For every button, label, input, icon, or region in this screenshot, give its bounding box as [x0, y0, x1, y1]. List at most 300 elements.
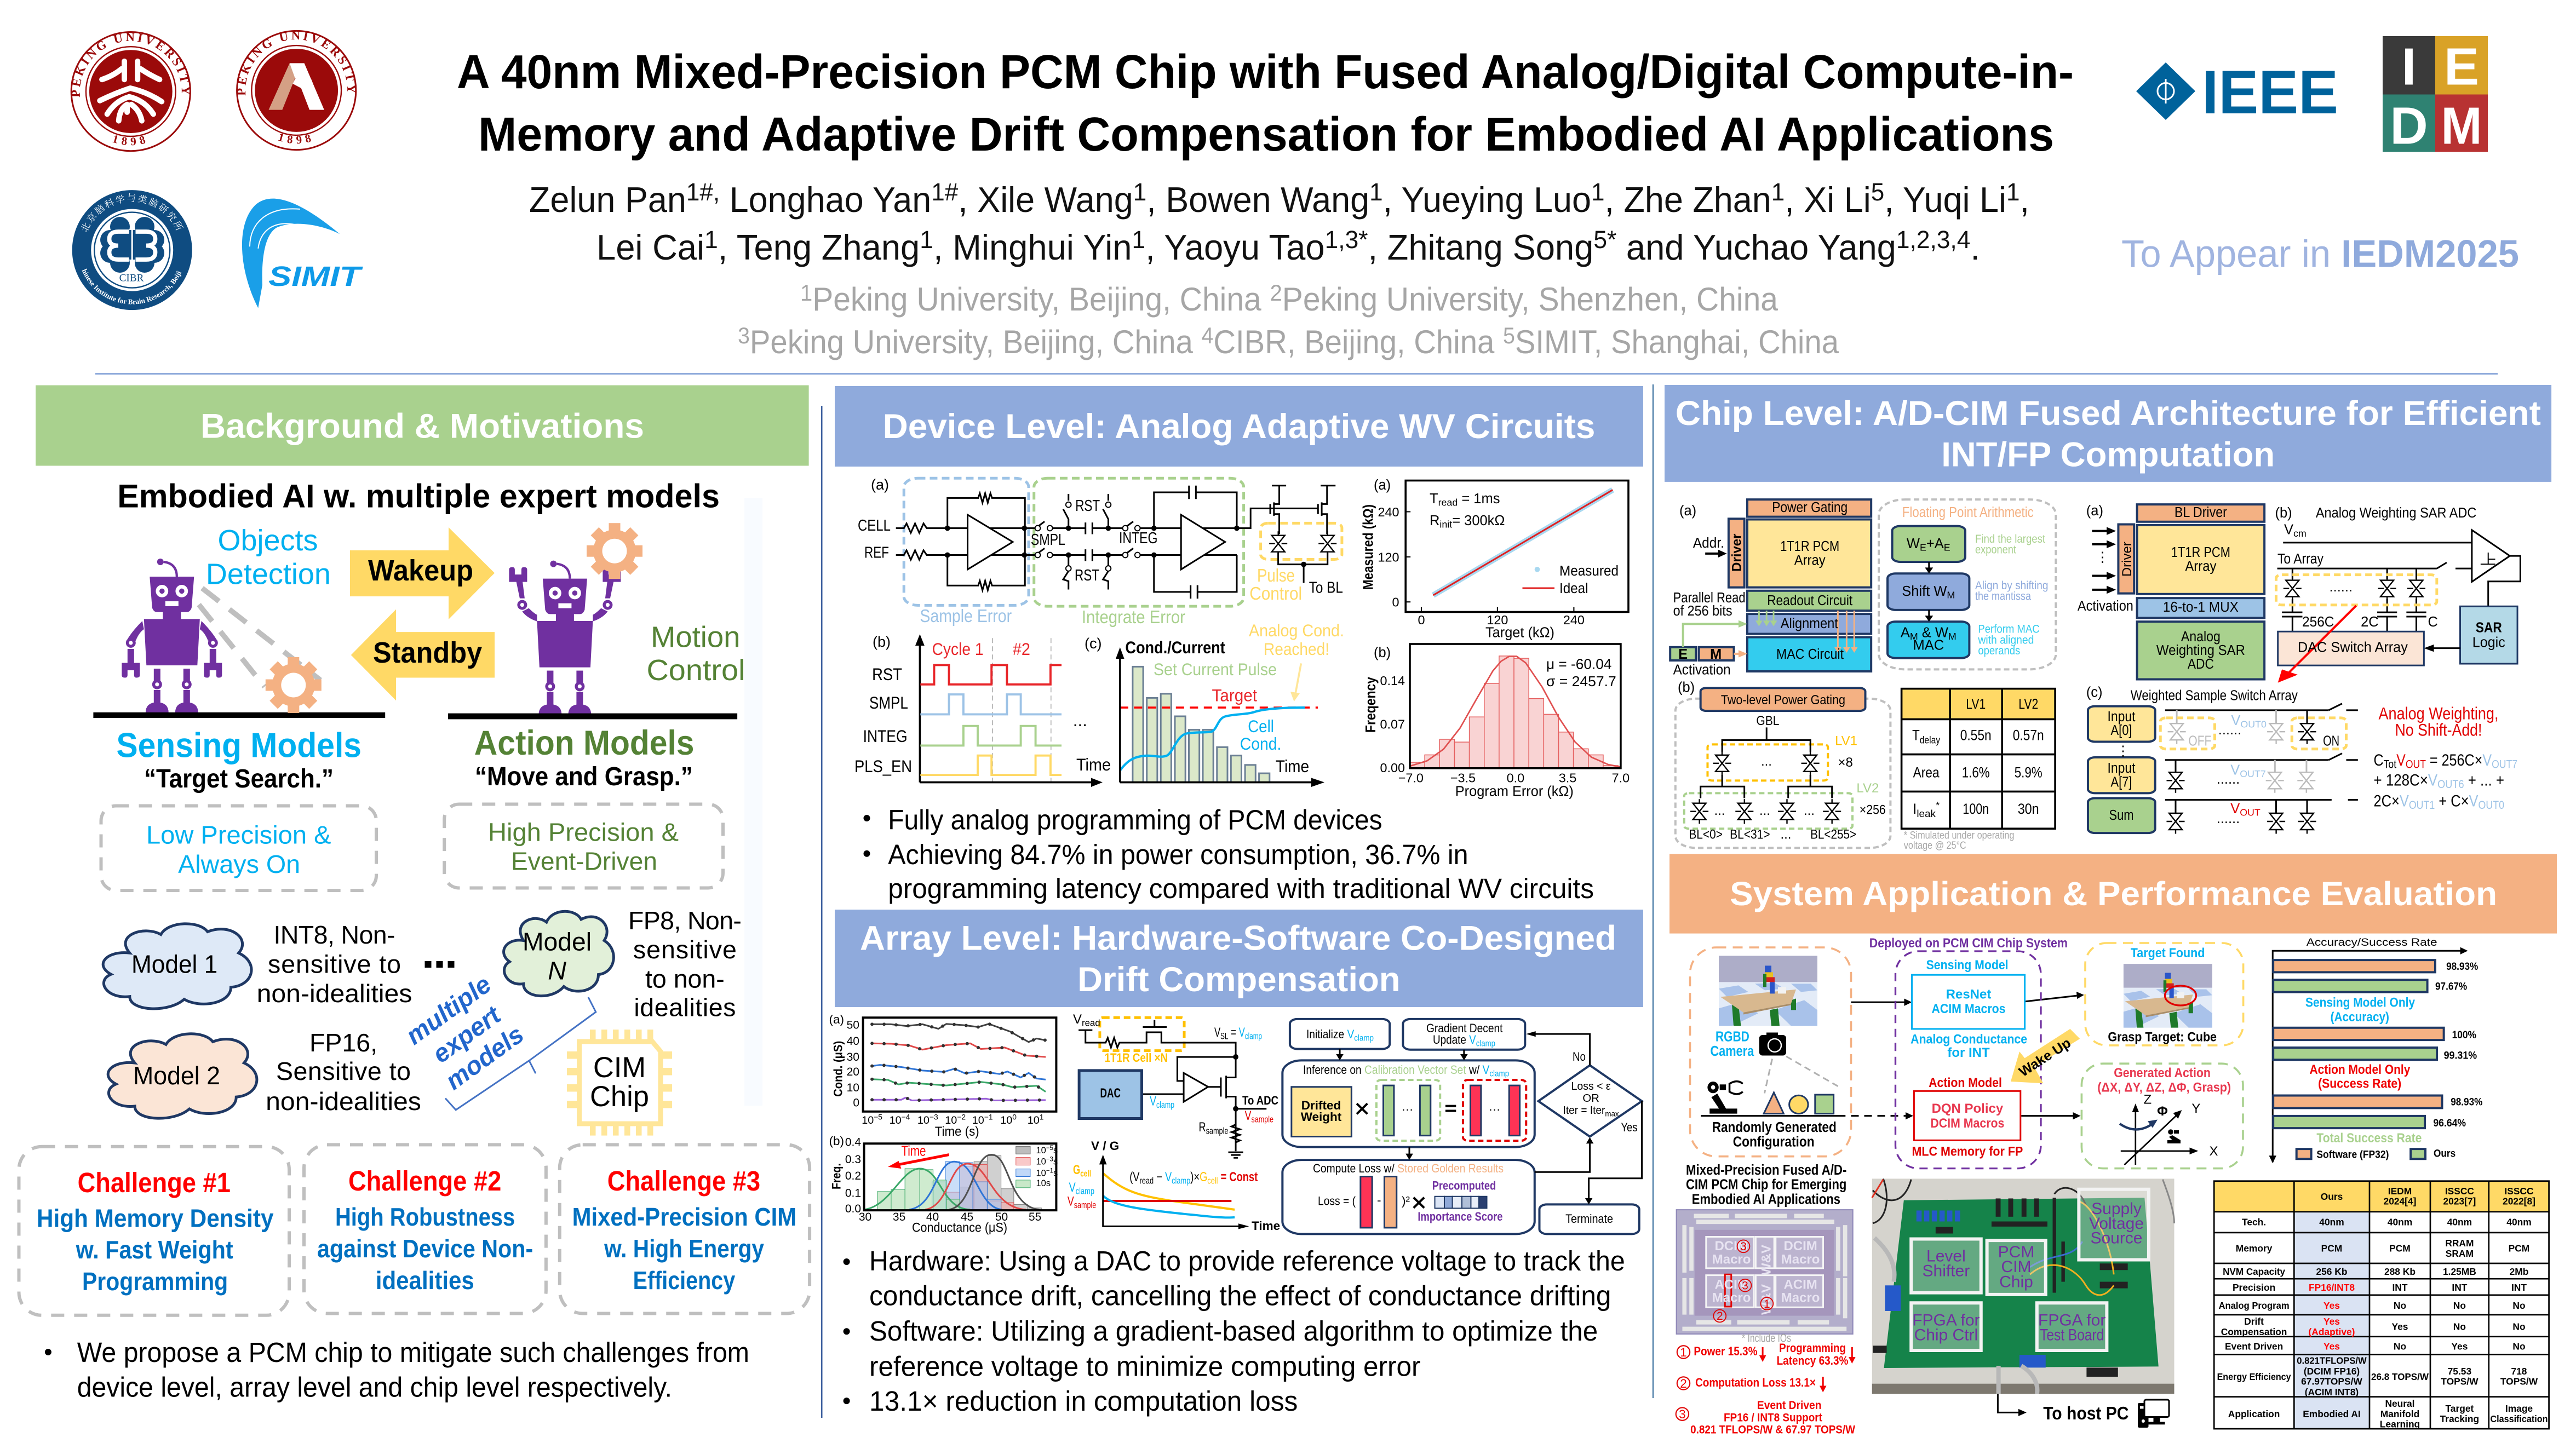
- diagram: two-level power gating: [1676, 680, 1890, 848]
- diagram: analog macro architecture: 1T1R PCM: [2171, 545, 2230, 560]
- table: comparison: TOPS/W: [2500, 1376, 2538, 1387]
- logo: IEDM: [2383, 36, 2488, 156]
- flowchart: gradient-based optimization: …: [1488, 1100, 1501, 1113]
- panel: challenge 3: [560, 1145, 810, 1313]
- authors: ,: [2020, 180, 2029, 220]
- chart: measured vs target: T: [1430, 491, 1438, 507]
- label: motion control: Control: [646, 654, 745, 687]
- table: comparison: No: [2394, 1341, 2406, 1352]
- cloud: model 2: [108, 1034, 257, 1118]
- heading: action models: Action Models: [474, 724, 694, 762]
- text: chip result metrics: 3: [1679, 1407, 1686, 1421]
- chart: measured vs target: 240: [1378, 505, 1399, 519]
- diagram: digital macro architecture: [1670, 499, 1871, 678]
- affiliations: 5: [1503, 323, 1515, 348]
- logo: Peking University seal: PEKING UNIVERSITY: [72, 33, 190, 97]
- chart: accuracy and success rate: (Accuracy): [2331, 1010, 2389, 1025]
- logo: IEEE: [2136, 58, 2338, 127]
- table: comparison: Energy Efficiency: [2217, 1371, 2291, 1382]
- diagram: two-level power gating: BL<0>: [1689, 827, 1723, 842]
- flowchart: gradient-based optimization: Gradient Decent: [1426, 1021, 1503, 1035]
- image: chip die photo: 3: [1740, 1240, 1747, 1253]
- chart: conductance histogram: Conductance (μS): [912, 1220, 1007, 1235]
- flowchart: gradient-based optimization: Initialize V: [1306, 1027, 1355, 1041]
- chart: accuracy and success rate: 98.93%: [2451, 1096, 2482, 1108]
- chart: measured vs target: Measured (kΩ): [1361, 504, 1376, 590]
- label: RGBD camera: RGBD: [1716, 1029, 1749, 1044]
- icon: camera: [1759, 1032, 1786, 1055]
- image: chip die photo: W&V: [1759, 1245, 1774, 1275]
- panel: challenge 1: Programming: [82, 1267, 228, 1296]
- affiliations: Peking University, Shenzhen, China: [1282, 281, 1778, 318]
- circuit: analog weighting SAR ADC: [2275, 505, 2520, 683]
- logo: CIBR: CIBR: [119, 273, 144, 284]
- image: test board photo: FPGA for: [1912, 1312, 1980, 1330]
- chart: accuracy and success rate: Sensing Model Only: [2305, 996, 2416, 1010]
- chart: timing diagram: SMPL: [869, 693, 908, 712]
- diagram: two-level power gating: LV1: [1835, 733, 1857, 748]
- affiliations: Peking University, Beijing, China: [750, 324, 1202, 360]
- chart: measured vs target: R: [1430, 513, 1439, 528]
- panel: deployed models: Deployed on PCM CIM Chip System: [1869, 936, 2068, 951]
- flowchart: gradient-based optimization: Weight: [1301, 1110, 1342, 1124]
- logo: IEDM: D: [2390, 97, 2428, 156]
- authors: 1,3*: [1325, 226, 1368, 254]
- table: comparison: Compensation: [2221, 1326, 2287, 1337]
- text: chip result metrics: * Include IOs: [1742, 1332, 1791, 1345]
- chart: conductance histogram: 55: [1029, 1211, 1041, 1223]
- chart: conductance over time: 10: [1028, 1114, 1040, 1126]
- circuit: analog weighting SAR ADC: To Array: [2277, 551, 2323, 567]
- diagram: two-level power gating: (b): [1678, 680, 1695, 695]
- text: proposal bullet: device level, array level and chip level respectively.: [77, 1372, 672, 1403]
- table: comparison: Yes: [2323, 1300, 2340, 1311]
- circuit: analog weighting SAR ADC: 256C: [2302, 614, 2334, 630]
- callout: low precision: [101, 806, 376, 890]
- circuit: analog weighting SAR ADC: SAR: [2476, 620, 2502, 635]
- authors: 1: [920, 226, 933, 254]
- circuit: DAC reference tracking: read: [1082, 1017, 1100, 1028]
- table: comparison: 2022[8]: [2503, 1196, 2535, 1207]
- flowchart: gradient-based optimization: clamp: [1354, 1033, 1374, 1043]
- circuit: weighted sample switch array: = 256C×: [2426, 751, 2482, 769]
- panel: generated action: Generated Action: [2114, 1066, 2211, 1080]
- panel: floating point arithmetic: & W: [1918, 625, 1948, 641]
- panel: floating point arithmetic: Perform MAC: [1978, 623, 2040, 636]
- circuit: analog WV: To BL: [1309, 579, 1343, 597]
- circuit: DAC reference tracking: clamp: [1156, 1100, 1174, 1110]
- heading: sensing models: Sensing Models: [116, 726, 362, 764]
- heading: system: System Application & Performance Evaluation: [1730, 875, 2497, 913]
- chart: conductance histogram: 10: [1036, 1168, 1046, 1178]
- arrow: wake up: [2011, 1029, 2080, 1083]
- chart: measured vs target: 120: [1487, 613, 1508, 627]
- panel: system application: [1669, 854, 2557, 1436]
- chart: voltage vs time: G: [1200, 1170, 1218, 1186]
- table: comparison: 75.53: [2448, 1366, 2471, 1377]
- circuit: analog weighting SAR ADC: (b): [2275, 505, 2292, 521]
- circuit: DAC reference tracking: V: [1073, 1012, 1082, 1027]
- label: multiple expert models: models: [440, 1020, 529, 1095]
- flowchart: gradient-based optimization: -: [1377, 1193, 1381, 1207]
- chart: conductance convergence: Time: [1276, 756, 1309, 776]
- heading: chip level: INT/FP Computation: [1941, 435, 2275, 474]
- chart: conductance over time: 0: [853, 1096, 859, 1109]
- table: comparison: 2Mb: [2510, 1266, 2528, 1277]
- chart: accuracy and success rate: 97.67%: [2435, 980, 2467, 992]
- authors: , Xi Li: [1785, 180, 1871, 220]
- image: chip die photo: Macro: [1781, 1252, 1820, 1267]
- panel: floating point arithmetic: with aligned: [1977, 634, 2034, 647]
- chart: timing diagram: INTEG: [863, 726, 908, 746]
- table: comparison: 40nm: [2447, 1217, 2472, 1228]
- logo: Peking University Shenzhen seal: 1898: [278, 134, 311, 143]
- chart: conductance over time: 10: [917, 1114, 930, 1126]
- table: power gating metrics: I: [1913, 801, 1917, 817]
- text: configuration: Configuration: [1733, 1135, 1815, 1150]
- chart: measured vs target: 0: [1392, 595, 1399, 610]
- label: objects detection: Objects: [217, 524, 318, 557]
- image: chip die photo: Macro: [1712, 1252, 1751, 1267]
- chart: conductance histogram: 10: [1036, 1146, 1046, 1155]
- icon: CIM chip: Chip: [590, 1080, 649, 1113]
- logo: Peking University seal: [70, 31, 191, 152]
- circuit: weighted sample switch array: OUT6: [2437, 778, 2464, 791]
- circuit: weighted sample switch array: A[7]: [2110, 774, 2132, 790]
- chart: voltage vs time: Time: [1252, 1219, 1280, 1233]
- heading: action models: “Move and Grasp.”: [475, 762, 693, 791]
- chart: measured vs target: Measured: [1559, 564, 1619, 579]
- flowchart: gradient-based optimization: clamp: [1476, 1039, 1495, 1048]
- logo: CIBR: 北京脑科学与类脑研究所: [81, 193, 183, 232]
- chart: conductance histogram: s: [1053, 1157, 1058, 1166]
- chart: voltage vs time: V / G: [1091, 1139, 1119, 1153]
- panel: target found: Grasp Target: Cube: [2108, 1030, 2217, 1044]
- cloud: model N: [504, 911, 613, 996]
- panel: challenge 2: Challenge #2: [348, 1165, 501, 1197]
- table: comparison: Application: [2228, 1408, 2280, 1419]
- panel: challenge 3: Challenge #3: [607, 1165, 760, 1197]
- diagram: digital macro architecture: Alignment: [1781, 616, 1838, 631]
- table: comparison: 718: [2511, 1366, 2527, 1377]
- authors: , Zhe Zhan: [1604, 180, 1771, 220]
- chart: conductance over time: 50: [847, 1019, 859, 1032]
- image: chip die photo: Macro: [1712, 1290, 1751, 1305]
- circuit: analog weighting SAR ADC: Logic: [2472, 635, 2505, 651]
- table: comparison: 2023[7]: [2443, 1196, 2476, 1207]
- circuit: DAC reference tracking: clamp: [1245, 1031, 1262, 1041]
- image: test board photo: Test Board: [2040, 1326, 2104, 1344]
- panel: floating point arithmetic: W: [1907, 536, 1920, 551]
- panel: challenge 3: Efficiency: [633, 1266, 735, 1295]
- chart: conductance over time: −3: [930, 1112, 938, 1121]
- authors: , Xile Wang: [958, 180, 1133, 220]
- chart: program error histogram: μ = -60.04: [1546, 657, 1611, 672]
- chart: program error histogram: 3.5: [1559, 771, 1576, 785]
- logo: Peking University seal: 1898: [113, 135, 146, 146]
- chart: conductance convergence: Cond.: [1240, 734, 1281, 754]
- circuit: weighted sample switch array: (c): [2086, 685, 2103, 700]
- diagram: digital macro architecture: Power Gating: [1772, 500, 1848, 515]
- heading: array level: Drift Compensation: [1077, 961, 1401, 999]
- diagram: two-level power gating: ×8: [1838, 755, 1853, 770]
- panel: deployed models: ACIM Macros: [1931, 1002, 2005, 1016]
- panel: deployed models: ResNet: [1946, 987, 1991, 1002]
- panel: generated action: Z: [2143, 1092, 2152, 1107]
- chart: conductance over time: (a): [829, 1013, 844, 1026]
- panel: floating point arithmetic: [1879, 499, 2056, 669]
- panel: floating point arithmetic: the mantissa: [1975, 590, 2031, 603]
- authors: Zelun Pan: [529, 180, 690, 220]
- image: chip die photo: DCIM: [1714, 1239, 1748, 1254]
- circuit: weighted sample switch array: Analog Weighting,: [2378, 703, 2498, 723]
- chart: conductance over time: 10: [972, 1114, 984, 1126]
- panel: floating point arithmetic: A: [1901, 625, 1910, 641]
- diagram: digital macro architecture: M: [1710, 647, 1722, 662]
- table: power gating metrics: *: [1936, 800, 1940, 812]
- chart: accuracy and success rate: 98.93%: [2446, 961, 2478, 973]
- text: array bullets: conductance drift, cancelling the effect of conductance drifting: [869, 1280, 1611, 1311]
- diagram: two-level power gating: ...: [1761, 754, 1772, 769]
- circuit: weighted sample switch array: Sum: [2109, 808, 2133, 823]
- chart: voltage vs time: V: [1069, 1180, 1077, 1195]
- chart: voltage vs time: [1068, 1139, 1280, 1233]
- panel: floating point arithmetic: Align by shifting: [1975, 579, 2048, 592]
- table: power gating metrics: LV1: [1966, 696, 1986, 712]
- chart: accuracy and success rate: Accuracy/Success Rate: [2307, 936, 2437, 948]
- heading: sensing models: “Target Search.”: [144, 764, 334, 794]
- diagram: digital macro architecture: E: [1678, 647, 1688, 662]
- flowchart: gradient-based optimization: clamp: [1489, 1070, 1509, 1079]
- label: motion control: Motion: [651, 620, 740, 653]
- subheading: embodied AI: Embodied AI w. multiple expert models: [117, 478, 720, 514]
- table: comparison: Target: [2445, 1403, 2474, 1414]
- circuit: weighted sample switch array: + ... +: [2464, 772, 2504, 790]
- table: power gating metrics: delay: [1920, 734, 1941, 746]
- table: power gating metrics: 5.9%: [2015, 764, 2043, 780]
- chart: conductance histogram: 50: [995, 1211, 1008, 1223]
- heading: action models: [474, 724, 694, 791]
- chart: program error histogram: −7.0: [1398, 771, 1424, 785]
- chart: conductance histogram: 0.1: [845, 1187, 861, 1199]
- label: objects detection: Detection: [206, 558, 331, 591]
- diagram: digital macro architecture: Addr.: [1693, 536, 1724, 551]
- logo: Peking University Shenzhen seal: PEKING UNIVERSITY: [238, 32, 355, 95]
- chart: accuracy and success rate: Software (FP32): [2316, 1148, 2389, 1160]
- authors: .: [1970, 228, 1980, 267]
- shapes: objects: [1764, 1092, 1834, 1114]
- table: comparison: Tech.: [2242, 1217, 2266, 1228]
- text: chip title: Embodied AI Applications: [1692, 1192, 1840, 1207]
- image: chip die photo: DCIM: [1783, 1239, 1817, 1254]
- circuit: weighted sample switch array: V: [2396, 751, 2426, 771]
- circuit: analog weighting SAR ADC: cm: [2293, 528, 2307, 539]
- chart: measured vs target: 120: [1378, 550, 1399, 564]
- table: power gating metrics: voltage @ 25°C: [1904, 840, 1966, 852]
- callout: low precision: Low Precision &: [146, 820, 331, 849]
- chart: accuracy and success rate: Total Success Rate: [2316, 1131, 2422, 1146]
- panel: generated action: (ΔX, ΔY, ΔZ, ΔΦ, Grasp): [2097, 1080, 2231, 1095]
- authors: 1: [1771, 178, 1785, 206]
- arrow: to host PC: [1998, 1394, 2169, 1428]
- chart: conductance over time: 10: [862, 1114, 874, 1126]
- text: chip result metrics: 1: [1680, 1346, 1687, 1359]
- chart: conductance convergence: (c): [1085, 635, 1101, 652]
- affiliations: 1: [800, 280, 812, 306]
- circuit: weighted sample switch array: [2086, 685, 2517, 833]
- flowchart: gradient-based optimization: )²: [1402, 1194, 1410, 1208]
- chart: voltage vs time: cell: [1207, 1175, 1218, 1186]
- chart: conductance histogram: s: [1053, 1146, 1058, 1155]
- arrow: standby: Standby: [373, 636, 482, 669]
- callout: high precision: Event-Driven: [511, 847, 657, 875]
- label: multiple expert models: multiple: [400, 970, 496, 1050]
- table: comparison: INT: [2511, 1282, 2527, 1293]
- callout: high precision: [444, 804, 723, 888]
- panel: input scene: [1690, 947, 1851, 1157]
- chart: accuracy and success rate: (Success Rate): [2318, 1077, 2401, 1091]
- chart: voltage vs time: cell: [1080, 1169, 1091, 1179]
- affiliations: CIBR, Beijing, China: [1213, 324, 1503, 360]
- diagram: two-level power gating: ...: [1804, 803, 1815, 818]
- flowchart: gradient-based optimization: No: [1573, 1050, 1586, 1063]
- circuit: DAC reference tracking: V: [1214, 1025, 1223, 1040]
- cloud: model 2: Model 2: [133, 1061, 220, 1090]
- chart: conductance over time: 10: [847, 1082, 859, 1094]
- chart: timing diagram: [854, 634, 1111, 787]
- text: proposal bullet: [45, 1337, 749, 1403]
- chart: voltage vs time: −: [1154, 1170, 1165, 1185]
- table: comparison: 0.821TFLOPS/W: [2297, 1355, 2367, 1366]
- diagram: two-level power gating: Two-level Power Gating: [1721, 693, 1845, 708]
- authors: , Minghui Yin: [933, 228, 1132, 267]
- image: test board photo: Supply: [2091, 1200, 2142, 1218]
- panel: floating point arithmetic: E: [1944, 542, 1950, 553]
- chart: conductance histogram: 10s: [1036, 1178, 1051, 1188]
- chart: conductance convergence: Cell: [1248, 716, 1274, 736]
- circuit: DAC reference tracking: To ADC: [1242, 1094, 1278, 1107]
- authors: [529, 178, 2029, 267]
- affiliations: Peking University, Beijing, China: [812, 281, 1270, 318]
- heading: sensing models: [116, 726, 362, 794]
- chart: voltage vs time: V: [1165, 1170, 1190, 1186]
- panel: deployed models: [1869, 936, 2068, 1169]
- panel: floating point arithmetic: M: [1947, 589, 1955, 600]
- logo: IEEE: IEEE: [2202, 58, 2338, 127]
- flowchart: gradient-based optimization: Yes: [1621, 1120, 1637, 1134]
- circuit: weighted sample switch array: OUT7: [2240, 768, 2266, 779]
- authors: 1: [2006, 178, 2020, 206]
- diagram: digital macro architecture: Array: [1794, 553, 1826, 568]
- table: comparison: 40nm: [2319, 1217, 2344, 1228]
- diagram: two-level power gating: ...: [1780, 827, 1791, 842]
- panel: floating point arithmetic: operands: [1978, 645, 2020, 657]
- circuit: DAC reference tracking: SL: [1220, 1031, 1228, 1041]
- diagram: analog macro architecture: [2078, 503, 2264, 680]
- table: comparison: No: [2453, 1300, 2466, 1311]
- chart: conductance histogram: Freq.: [829, 1163, 843, 1189]
- panel: floating point arithmetic: M: [1948, 631, 1957, 642]
- affiliations: 4: [1202, 323, 1213, 348]
- diagram: digital macro architecture: Driver: [1729, 534, 1744, 572]
- table: power gating metrics: 30n: [2018, 801, 2039, 817]
- panel: floating point arithmetic: Shift W: [1902, 584, 1947, 599]
- callout: high precision: High Precision &: [488, 818, 679, 846]
- chart: conductance convergence: Set Current Pulse: [1154, 659, 1277, 679]
- chart: conductance histogram: 0.4: [845, 1136, 861, 1148]
- circuit: analog weighting SAR ADC: V: [2284, 522, 2293, 538]
- icon: robot arm: [1701, 1082, 1845, 1116]
- title: A 40nm Mixed-Precision PCM Chip with Fused Analog/Digital Compute-in-: [457, 45, 2074, 99]
- circuit: analog WV: Sample Error: [920, 606, 1012, 626]
- arrow: wakeup: Wakeup: [368, 554, 473, 587]
- heading: device level: Device Level: Analog Adaptive WV Circuits: [883, 407, 1595, 446]
- heading: chip level: Chip Level: A/D-CIM Fused Architecture for Efficient: [1676, 394, 2541, 433]
- image: test board photo: Chip Ctrl: [1914, 1326, 1978, 1344]
- flowchart: gradient-based optimization: max: [1605, 1109, 1619, 1118]
- image: chip die photo: 3: [1742, 1279, 1748, 1292]
- chart: program error histogram: (b): [1374, 645, 1391, 660]
- chart: conductance histogram: −3: [1046, 1156, 1053, 1163]
- authors: , Bowen Wang: [1146, 180, 1369, 220]
- flowchart: gradient-based optimization: Terminate: [1565, 1212, 1613, 1226]
- chart: conductance over time: −5: [874, 1112, 882, 1121]
- image: test board photo: FPGA for: [2038, 1312, 2105, 1330]
- chart: timing diagram: #2: [1013, 639, 1030, 659]
- label: motion control: [646, 620, 745, 687]
- table: power gating metrics: [1902, 689, 2055, 852]
- label: RGBD camera: [1710, 1029, 1754, 1059]
- authors: , Yaoyu Tao: [1145, 228, 1325, 267]
- diagram: digital macro architecture: MAC Circuit: [1776, 647, 1844, 662]
- arrow: wakeup: [350, 527, 495, 619]
- table: comparison: RRAM: [2445, 1238, 2474, 1249]
- text: INT8 description: INT8, Non-: [273, 921, 395, 949]
- circuit: DAC reference tracking: 1T1R Cell ×N: [1105, 1051, 1168, 1065]
- heading: array level: [835, 910, 1643, 1007]
- image: chip die photo: W&V: [1759, 1284, 1774, 1315]
- image: chip die photo: 2: [1717, 1310, 1723, 1323]
- table: comparison: Yes: [2323, 1316, 2340, 1327]
- flowchart: gradient-based optimization: Update V: [1433, 1033, 1477, 1046]
- chart: conductance over time: 10: [1000, 1114, 1012, 1126]
- table: comparison: Tracking: [2440, 1413, 2479, 1424]
- table: comparison: 26.8 TOPS/W: [2371, 1371, 2429, 1382]
- table: comparison: Drift: [2244, 1316, 2264, 1327]
- circuit: analog WV: RST: [1075, 497, 1100, 515]
- table: comparison: 2024[4]: [2384, 1196, 2416, 1207]
- panel: deployed models: MLC Memory for FP: [1912, 1144, 2023, 1159]
- text: chip result metrics: [1676, 1332, 1856, 1436]
- circuit: analog WV: RST: [1075, 567, 1099, 584]
- circuit: weighted sample switch array: ......: [2218, 722, 2241, 738]
- panel: challenge 2: against Device Non-: [317, 1234, 533, 1263]
- flowchart: gradient-based optimization: [1282, 1019, 1642, 1234]
- text: array bullets: [844, 1245, 1625, 1417]
- panel: challenge 3: Mixed-Precision CIM: [572, 1203, 796, 1231]
- panel: chip level: [1665, 385, 2551, 852]
- chart: timing diagram: RST: [872, 664, 902, 684]
- panel: challenge 2: idealities: [376, 1266, 474, 1295]
- arrows: model flow: [1851, 992, 2084, 1119]
- chart: conductance histogram: 30: [859, 1211, 871, 1223]
- logo: IEDM: E: [2444, 38, 2479, 96]
- diagram: analog macro architecture: Weighting SAR: [2156, 643, 2245, 658]
- chart: conductance over time: −2: [957, 1112, 966, 1121]
- panel: challenge 3: w. High Energy: [604, 1234, 764, 1263]
- affiliations: 3: [738, 323, 750, 348]
- authors: , Teng Zhang: [718, 228, 920, 267]
